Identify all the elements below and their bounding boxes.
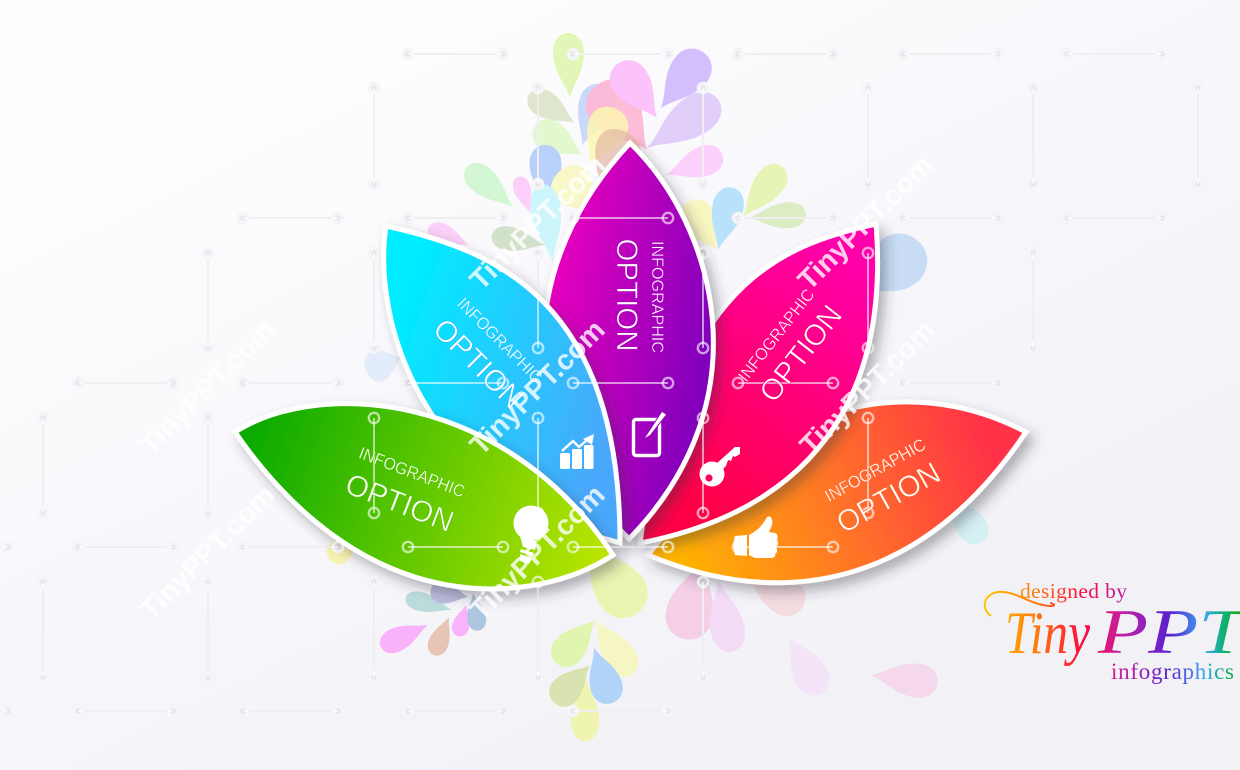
petal: orange bbox=[648, 402, 1026, 583]
label: pink petal: OPTION bbox=[753, 299, 849, 409]
logo: designed by TinyPPT infographics: designed by bbox=[1020, 579, 1127, 603]
label: green petal: OPTION bbox=[341, 468, 458, 539]
watermarks: TinyPPT.com bbox=[134, 314, 282, 462]
logo: designed by TinyPPT infographics: Tiny bbox=[1005, 600, 1090, 666]
logo: designed by TinyPPT infographics: PPT bbox=[1097, 596, 1240, 667]
petal: pink bbox=[640, 224, 878, 543]
watermarks: TinyPPT.com bbox=[464, 479, 612, 627]
label: orange petal: OPTION bbox=[831, 456, 946, 540]
label: green petal: INFOGRAPHIC bbox=[356, 444, 468, 501]
label: pink petal: INFOGRAPHIC bbox=[734, 285, 818, 385]
watermarks: TinyPPT.com bbox=[464, 149, 612, 297]
watermarks: TinyPPT.com bbox=[134, 479, 282, 627]
petal: purple bbox=[544, 143, 713, 539]
petal: blue bbox=[384, 226, 620, 543]
splash of coloured drops: top bbox=[323, 32, 995, 568]
label: orange petal: INFOGRAPHIC bbox=[822, 435, 929, 506]
label: purple petal: INFOGRAPHIC bbox=[648, 241, 667, 353]
splash of coloured drops: bottom bbox=[376, 530, 940, 741]
icon: growth chart bbox=[560, 434, 594, 469]
watermarks: TinyPPT.com bbox=[792, 149, 940, 297]
label: blue petal: INFOGRAPHIC bbox=[453, 294, 546, 387]
icon: pencil and pad bbox=[634, 412, 666, 456]
logo: designed by TinyPPT infographics: infographics bbox=[1111, 659, 1234, 684]
icon: key bbox=[700, 447, 740, 486]
watermarks bbox=[134, 149, 942, 627]
logo: designed by TinyPPT infographics bbox=[985, 579, 1240, 684]
label: purple petal bbox=[610, 238, 667, 353]
watermarks: TinyPPT.com bbox=[464, 314, 612, 462]
label: green petal bbox=[341, 444, 468, 539]
icon: light bulb bbox=[514, 506, 548, 564]
watermarks: TinyPPT.com bbox=[794, 314, 942, 462]
label: blue petal: OPTION bbox=[426, 312, 530, 416]
icon: thumbs up bbox=[734, 516, 778, 558]
petal: green bbox=[235, 404, 613, 589]
label: purple petal: OPTION bbox=[610, 238, 643, 352]
